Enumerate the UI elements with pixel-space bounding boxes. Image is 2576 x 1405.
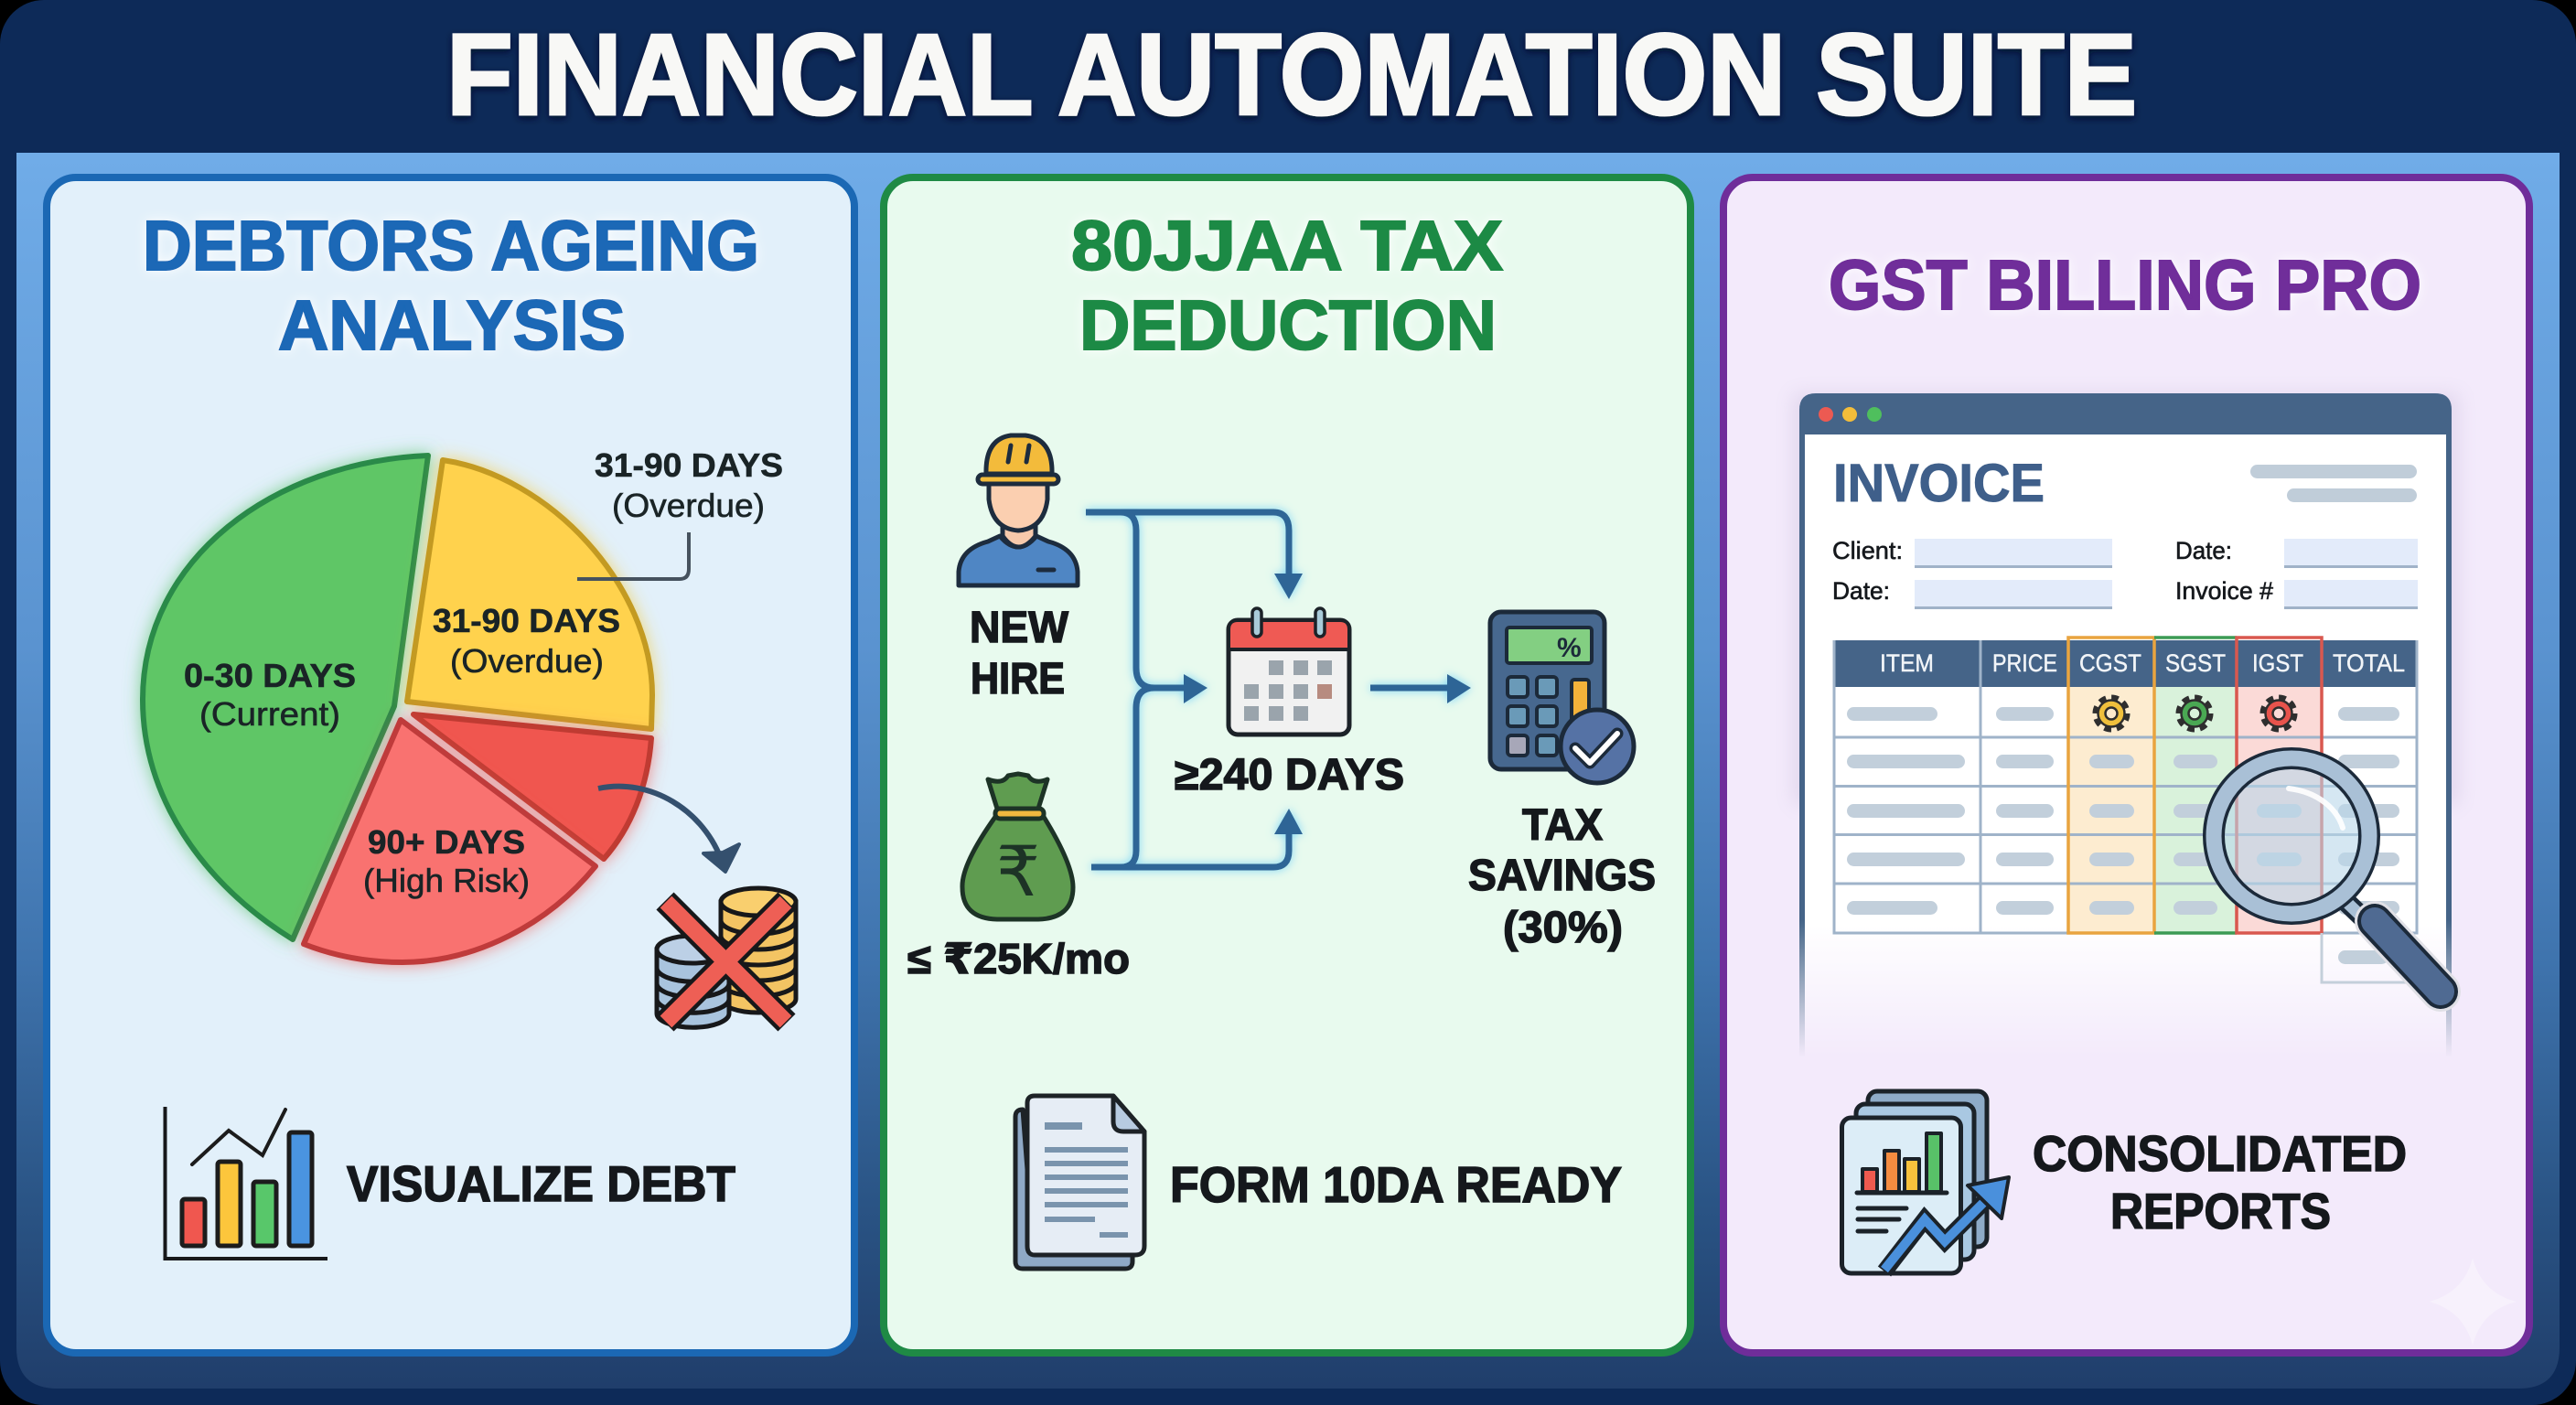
label: consolidated reports: CONSOLIDATED: [2033, 1125, 2407, 1182]
table column titles: TOTAL: [2333, 649, 2405, 677]
window body: [1799, 434, 2452, 1057]
icon: bar and line chart: [165, 1107, 327, 1259]
slice: 90+ days lower: [304, 720, 596, 962]
invoice form fields: Date:: [1832, 577, 1890, 605]
table column titles: ITEM: [1880, 649, 1934, 677]
label: 240 days: ≥240 DAYS: [1175, 751, 1404, 799]
icon: magnifying glass: [2214, 758, 2441, 992]
slice: 90+ days upper: [413, 714, 651, 859]
panel 1 heading: [143, 207, 759, 365]
icon: crossed out coins: [657, 888, 796, 1027]
panel: debtors ageing analysis: [47, 177, 854, 1353]
table column titles: PRICE: [1992, 649, 2057, 677]
panel 3 heading: GST BILLING PRO: [1829, 246, 2421, 325]
window title bar: [1799, 393, 2452, 434]
arrows: eligibility flow: [1086, 512, 1471, 867]
icon: igst gear: [2263, 698, 2294, 729]
label: tax savings 30%: TAX: [1522, 801, 1603, 850]
slice: 31-90 days: [407, 460, 652, 729]
icon: cgst gear: [2096, 698, 2127, 729]
label: tax savings 30%: (30%): [1503, 904, 1623, 952]
icon: new hire worker: [959, 435, 1078, 585]
tax table: [1834, 638, 2417, 982]
table header row: [1834, 640, 2417, 687]
icon: rupee money bag: [962, 774, 1073, 919]
icon: rupee money bag: ₹: [996, 833, 1040, 911]
label: 90+ days: [363, 823, 530, 899]
label: form 10da ready: FORM 10DA READY: [1170, 1156, 1622, 1213]
panel 1 heading: DEBTORS AGEING: [143, 207, 759, 285]
panel: gst billing pro: [1723, 177, 2529, 1353]
label: 0-30 days: 0-30 DAYS: [184, 657, 356, 694]
column tints: [2068, 687, 2322, 933]
icon: consolidated reports: [1842, 1091, 2009, 1273]
panel 2 heading: [1071, 207, 1503, 365]
address placeholder lines: [2250, 465, 2417, 502]
label: 0-30 days: (Current): [199, 695, 340, 733]
label: 0-30 days: [184, 657, 356, 733]
label: 31-90 days inner: (Overdue): [450, 642, 604, 680]
invoice form fields: [1832, 537, 2418, 609]
red cross: [665, 901, 787, 1023]
pie chart: [143, 456, 652, 962]
label: new hire: NEW: [970, 604, 1069, 652]
label: consolidated reports: REPORTS: [2110, 1183, 2331, 1239]
panel: 80JJAA tax deduction: [884, 177, 1690, 1353]
column highlights: [2068, 638, 2322, 933]
invoice window: [1793, 393, 2459, 1057]
invoice form fields: Client:: [1832, 537, 1903, 564]
table column titles: IGST: [2252, 649, 2303, 677]
panel 1 card: [47, 177, 854, 1353]
table grid: [1834, 640, 2417, 933]
slice: 0-30 days: [143, 456, 428, 939]
panel 1 heading: ANALYSIS: [278, 286, 626, 365]
icon: sgst gear: [2179, 698, 2210, 729]
callout: 31-90 days outer: (Overdue): [612, 487, 765, 524]
callout: 31-90 days outer: 31-90 DAYS: [595, 446, 783, 484]
label: tax savings 30%: [1468, 801, 1656, 952]
panel 2 heading: 80JJAA TAX: [1071, 207, 1503, 285]
label: salary limit: ≤ ₹25K/mo: [907, 935, 1130, 982]
invoice form fields: Date:: [2175, 537, 2232, 564]
invoice form fields: Invoice #: [2175, 577, 2273, 605]
label: 31-90 days inner: 31-90 DAYS: [433, 602, 620, 639]
icon: sparkle watermark: [2429, 1258, 2517, 1346]
panel 2 heading: DEDUCTION: [1079, 286, 1497, 365]
panel 2 card: [884, 177, 1690, 1353]
blue stack: [657, 936, 729, 1027]
label: tax savings 30%: SAVINGS: [1468, 852, 1656, 900]
gold stack: [721, 888, 796, 1013]
icon: document form: [1015, 1096, 1144, 1269]
label: 31-90 days inner: [433, 602, 620, 680]
label: new hire: HIRE: [971, 655, 1065, 703]
icon: calculator with check badge: %: [1557, 633, 1582, 663]
label: new hire: [970, 604, 1069, 703]
label: consolidated reports: [2033, 1125, 2407, 1239]
panel 3 card: [1723, 177, 2529, 1353]
table column titles: [1880, 649, 2405, 677]
label: visualize debt: VISUALIZE DEBT: [347, 1155, 735, 1212]
title: FINANCIAL AUTOMATION SUITE: [446, 10, 2137, 139]
icon: calendar: [1229, 608, 1349, 735]
label: 90+ days: 90+ DAYS: [368, 823, 525, 861]
icon: calculator with check badge: [1490, 612, 1634, 783]
label: 90+ days: (High Risk): [363, 862, 530, 899]
callout: 31-90 days outer: [577, 446, 783, 579]
table column titles: CGST: [2079, 649, 2141, 677]
arrow: high risk to write-off: [598, 787, 739, 872]
total cell: [2322, 933, 2417, 982]
invoice heading: INVOICE: [1833, 454, 2045, 513]
placeholder cells: [1847, 707, 2399, 915]
table column titles: SGST: [2165, 649, 2226, 677]
